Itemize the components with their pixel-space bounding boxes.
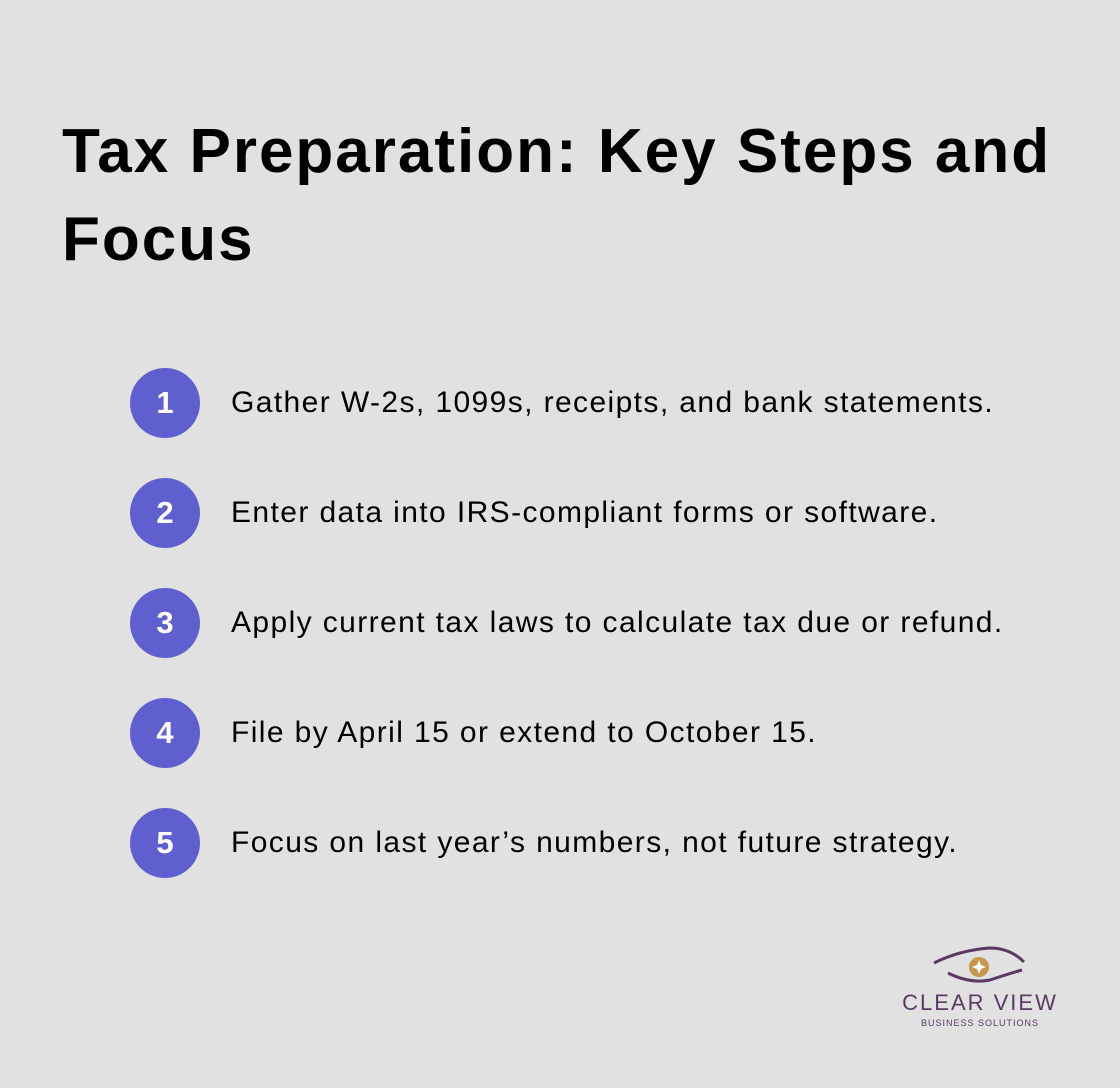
step 3: Apply current tax laws to calculate tax due or refund.: [231, 606, 1004, 639]
step 2: [130, 478, 938, 548]
step 5: 5: [156, 825, 174, 860]
logo: [902, 946, 1058, 1028]
step 2: Enter data into IRS-compliant forms or software.: [231, 496, 938, 529]
logo: BUSINESS SOLUTIONS: [921, 1018, 1039, 1028]
step 5: Focus on last year’s numbers, not future strategy.: [231, 826, 958, 859]
step 3: 3: [156, 605, 174, 640]
step 3: [130, 588, 1004, 658]
step 1: Gather W-2s, 1099s, receipts, and bank statements.: [231, 386, 994, 419]
step 4: [130, 698, 817, 768]
step 5: [130, 808, 958, 878]
step 4: 4: [156, 715, 174, 750]
title: Tax Preparation: Key Steps and Focus: [62, 117, 1051, 274]
step 1: 1: [156, 385, 174, 420]
step 2: 2: [156, 495, 174, 530]
logo: CLEAR VIEW: [902, 990, 1058, 1015]
step 1: [130, 368, 994, 438]
step 4: File by April 15 or extend to October 15.: [231, 716, 817, 749]
